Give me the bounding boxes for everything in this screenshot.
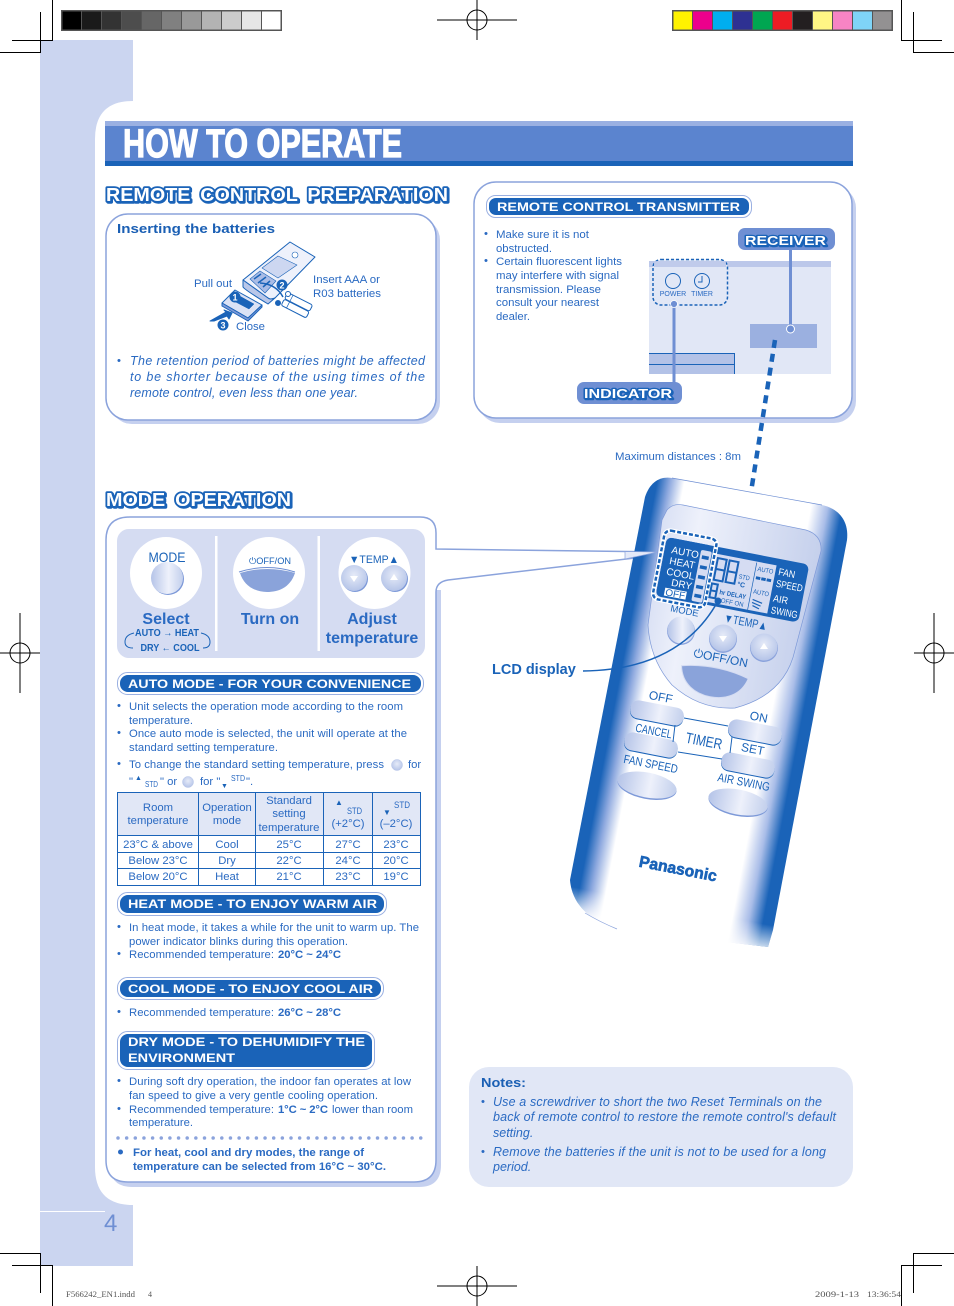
- cool mode text: [117, 1006, 341, 1019]
- timer buttons: CANCEL: [634, 721, 673, 742]
- dashed signal line: [751, 340, 775, 492]
- LCD display: FAN: [777, 567, 796, 581]
- step: select: DRY ← COOL: [140, 643, 200, 654]
- icon: step numbers: 1: [232, 292, 238, 302]
- maximum distance label: Maximum distances : 8m: [615, 451, 741, 463]
- illustration: remote control: [570, 478, 847, 947]
- step: adjust temperature: ▼TEMP▲: [349, 554, 399, 566]
- heat mode text: 20°C ~ 24°C: [278, 949, 341, 961]
- temperature range note: temperature can be selected from 16°C ~ 30°C.: [133, 1161, 386, 1173]
- auto mode text: [117, 700, 421, 790]
- table: standard setting temperatures: 23°C: [335, 871, 361, 883]
- icon: step numbers: 3: [220, 320, 226, 330]
- icon: step numbers: [218, 280, 288, 330]
- panel: notes: Notes:: [481, 1075, 526, 1090]
- control labels: [667, 603, 778, 703]
- LCD display: [652, 530, 811, 627]
- pill heading: auto mode: [118, 672, 424, 694]
- auto mode text: ▲: [135, 775, 142, 782]
- LCD display: OFF: [664, 587, 686, 602]
- table: standard setting temperatures: mode: [213, 815, 241, 827]
- indoor unit diagram: POWER: [660, 291, 686, 298]
- table: standard setting temperatures: 22°C: [276, 855, 302, 867]
- table: standard setting temperatures: 24°C: [335, 855, 361, 867]
- label: receiver: RECEIVER: [745, 233, 827, 248]
- step: select: MODE: [148, 549, 186, 565]
- LCD display: STD: [738, 573, 750, 582]
- control labels: MODE: [669, 603, 700, 620]
- panel: notes: Use a screwdriver to short the two Reset Terminals on the: [493, 1095, 822, 1109]
- pill heading: remote control transmitter: [486, 196, 752, 218]
- auto mode text: To change the standard setting temperature, press: [129, 759, 384, 771]
- table: standard setting temperatures: Operation: [202, 802, 252, 814]
- heat mode text: [117, 921, 419, 961]
- table: standard setting temperatures: 23°C & above: [123, 839, 193, 851]
- timer buttons: SET: [740, 740, 766, 758]
- auto mode text: temperature.: [129, 715, 193, 727]
- callout: LCD display: LCD display: [492, 662, 576, 678]
- table: standard setting temperatures: Below 23°C: [128, 855, 188, 867]
- panel: inserting the batteries: [106, 214, 440, 424]
- process colour bar: [672, 10, 893, 31]
- step: turn on: Turn on: [241, 611, 299, 628]
- page number: 4: [104, 1210, 117, 1237]
- cool mode text: Recommended temperature:: [129, 1007, 274, 1019]
- table: standard setting temperatures: ▲: [335, 798, 343, 807]
- step: adjust temperature: temperature: [326, 630, 418, 647]
- temperature range note: For heat, cool and dry modes, the range of: [133, 1147, 364, 1159]
- control labels: ▼TEMP▲: [723, 611, 769, 633]
- step: select: [125, 549, 210, 654]
- LCD display: °C: [737, 580, 746, 590]
- cool mode text: 26°C ~ 28°C: [278, 1007, 341, 1019]
- timer buttons: TIMER: [684, 730, 724, 753]
- transmitter tips: Certain fluorescent lights: [496, 256, 622, 268]
- table: standard setting temperatures: Cool: [215, 839, 239, 851]
- panel: notes: •: [481, 1096, 485, 1108]
- panel: notes: period.: [492, 1160, 531, 1174]
- table: standard setting temperatures: temperature: [128, 815, 188, 827]
- panel: inserting the batteries: Close: [236, 321, 265, 333]
- heat mode text: •: [117, 921, 121, 933]
- LCD display: AIR: [772, 593, 789, 607]
- table: standard setting temperatures: Dry: [218, 855, 236, 867]
- timer buttons: OFF: [648, 688, 674, 706]
- timer buttons: AIR SWING: [716, 770, 771, 794]
- transmitter tips: [484, 228, 622, 323]
- table: standard setting temperatures: Standard: [266, 795, 312, 807]
- auto mode text: for ": [200, 776, 220, 788]
- dry mode text: [117, 1075, 413, 1129]
- table: standard setting temperatures: STD: [347, 806, 362, 816]
- indoor unit diagram: [649, 250, 831, 384]
- step: turn on: [239, 556, 299, 628]
- LCD display: hr DELAY: [719, 589, 747, 601]
- auto mode text: ".: [246, 776, 253, 788]
- table: standard setting temperatures: (+2°C): [331, 818, 365, 830]
- pill heading: dry mode: [118, 1032, 374, 1070]
- pill heading: heat mode: [118, 892, 386, 916]
- steps strip: select, turn on, adjust: [117, 529, 425, 658]
- transmitter tips: •: [484, 228, 488, 240]
- transmitter tips: transmission. Please: [496, 284, 601, 296]
- transmitter tips: •: [484, 255, 488, 267]
- panel: inserting the batteries: Inserting the batteries: [117, 221, 275, 236]
- title banner: HOW TO OPERATE: [123, 122, 402, 166]
- heading: mode operation: MODE OPERATION: [106, 490, 291, 510]
- table: standard setting temperatures: setting: [272, 808, 306, 820]
- pill heading: cool mode: COOL MODE - TO ENJOY COOL AIR: [128, 982, 373, 996]
- remote body: [570, 478, 847, 947]
- auto mode text: ": [129, 776, 133, 788]
- panel: inserting the batteries: R03 batteries: [313, 288, 381, 300]
- icon: remote with battery compartment: [210, 242, 315, 321]
- panel: notes: setting.: [493, 1126, 533, 1140]
- step: adjust temperature: [326, 554, 418, 647]
- dry mode text: During soft dry operation, the indoor fan operates at low: [129, 1076, 412, 1088]
- LCD display: AUTO: [752, 589, 769, 598]
- heat mode text: •: [117, 948, 121, 960]
- print footer: [66, 1290, 901, 1299]
- table: standard setting temperatures: Room: [143, 802, 173, 814]
- LCD display: HEAT: [668, 556, 696, 572]
- pill heading: dry mode: ENVIRONMENT: [128, 1051, 236, 1065]
- timer buttons: FAN SPEED: [622, 752, 679, 776]
- heat mode text: power indicator blinks during this operation.: [129, 936, 348, 948]
- panel: remote control transmitter: [474, 182, 856, 423]
- dry mode text: 1°C ~ 2°C: [278, 1104, 328, 1116]
- title banner: [105, 121, 853, 166]
- transmitter tips: Make sure it is not: [496, 229, 590, 241]
- table: standard setting temperatures: 27°C: [335, 839, 361, 851]
- auto mode text: STD: [231, 774, 245, 783]
- panel: notes: [469, 1067, 853, 1187]
- step: select: Select: [142, 611, 190, 628]
- panel: mode operation: [106, 517, 662, 1187]
- LCD display: AUTO: [757, 566, 774, 576]
- auto mode text: •: [117, 727, 121, 739]
- auto mode text: for: [408, 759, 421, 771]
- table: standard setting temperatures: 21°C: [276, 871, 302, 883]
- panel: notes: Remove the batteries if the unit is not to be used for a long: [493, 1145, 826, 1159]
- table: standard setting temperatures: 19°C: [383, 871, 409, 883]
- print footer: 2009-1-13: [815, 1290, 859, 1299]
- step: adjust temperature: Adjust: [347, 611, 398, 628]
- icon: step numbers: 2: [279, 280, 285, 290]
- panel: inserting the batteries: •: [117, 355, 121, 367]
- LCD display: COOL: [665, 567, 696, 583]
- heading: remote control preparation: REMOTE CONTROL PREPARATION: [106, 185, 448, 205]
- dry mode text: lower than room: [332, 1104, 413, 1116]
- indoor unit diagram: TIMER: [691, 291, 713, 298]
- callout: LCD display: [492, 598, 722, 678]
- table: standard setting temperatures: 20°C: [383, 855, 409, 867]
- panel: notes: •: [481, 1146, 485, 1158]
- panel: notes: back of remote control to restore the remote control's default: [493, 1110, 837, 1124]
- connector wedge to LCD: [625, 552, 658, 559]
- heat mode text: Recommended temperature:: [129, 949, 274, 961]
- heat mode text: In heat mode, it takes a while for the unit to warm up. The: [129, 922, 419, 934]
- print footer: 4: [148, 1290, 152, 1299]
- panel: inserting the batteries: The retention period of batteries might be affected: [130, 354, 426, 368]
- pill heading: dry mode: DRY MODE - TO DEHUMIDIFY THE: [128, 1035, 365, 1049]
- table: standard setting temperatures: 23°C: [383, 839, 409, 851]
- LCD display: DRY: [670, 578, 693, 593]
- label: indicator: [577, 382, 682, 404]
- panel: inserting the batteries: to be shorter because of the using times of the: [130, 370, 425, 384]
- transmitter tips: dealer.: [496, 311, 530, 323]
- temperature range note: [118, 1147, 386, 1173]
- dry mode text: temperature.: [129, 1117, 193, 1129]
- step: select: AUTO → HEAT: [135, 628, 199, 639]
- dry mode text: Recommended temperature:: [129, 1104, 274, 1116]
- LCD display: SWING: [770, 605, 799, 621]
- auto mode text: Once auto mode is selected, the unit will operate at the: [129, 728, 407, 740]
- auto mode text: standard setting temperature.: [129, 742, 278, 754]
- dry mode text: •: [117, 1103, 121, 1115]
- table: standard setting temperatures: ▼: [383, 808, 391, 817]
- step: turn on: ⏻OFF/ON: [249, 556, 291, 566]
- table: standard setting temperatures: (–2°C): [380, 818, 413, 830]
- dry mode text: fan speed to give a very gentle cooling operation.: [129, 1090, 378, 1102]
- table: standard setting temperatures: Below 20°C: [128, 871, 188, 883]
- LCD display: AUTO: [670, 545, 700, 561]
- panel: inserting the batteries: Pull out: [194, 278, 233, 290]
- LCD display: SPEED: [775, 579, 804, 595]
- label: indicator: INDICATOR: [584, 386, 673, 401]
- transmitter tips: consult your nearest: [496, 297, 600, 309]
- control labels: ⏻OFF/ON: [692, 646, 749, 670]
- pill heading: remote control transmitter: REMOTE CONTROL TRANSMITTER: [497, 200, 740, 214]
- faceplate: [648, 505, 821, 708]
- auto mode text: Unit selects the operation mode according to the room: [129, 701, 403, 713]
- label: receiver: [738, 228, 835, 250]
- table: standard setting temperatures: Heat: [215, 871, 240, 883]
- auto mode text: " or: [160, 776, 177, 788]
- timer buttons: [615, 688, 783, 821]
- grayscale colour bar: [61, 10, 282, 31]
- auto mode text: •: [117, 758, 121, 770]
- brand name: Panasonic: [637, 854, 718, 885]
- print footer: F566242_EN1.indd: [66, 1290, 135, 1299]
- print footer: 13:36:54: [867, 1290, 901, 1299]
- panel: inserting the batteries: remote control, even less than one year.: [130, 386, 358, 400]
- auto mode text: ▼: [221, 783, 228, 790]
- pill heading: auto mode: AUTO MODE - FOR YOUR CONVENIENCE: [128, 677, 411, 691]
- auto mode text: STD: [145, 780, 158, 789]
- transmitter tips: obstructed.: [496, 243, 552, 255]
- table: standard setting temperatures: 25°C: [276, 839, 302, 851]
- cool mode text: •: [117, 1006, 121, 1018]
- timer buttons: ON: [749, 708, 769, 726]
- dry mode text: •: [117, 1075, 121, 1087]
- pill heading: heat mode: HEAT MODE - TO ENJOY WARM AIR: [128, 897, 377, 911]
- LCD display: OFF ON: [720, 598, 744, 609]
- panel: inserting the batteries: Insert AAA or: [313, 274, 380, 286]
- transmitter tips: may interfere with signal: [496, 270, 619, 282]
- table: standard setting temperatures: temperature: [259, 822, 319, 834]
- auto mode text: •: [117, 700, 121, 712]
- table: standard setting temperatures: [118, 792, 420, 886]
- table: standard setting temperatures: STD: [394, 800, 410, 810]
- pill heading: cool mode: [118, 978, 384, 1000]
